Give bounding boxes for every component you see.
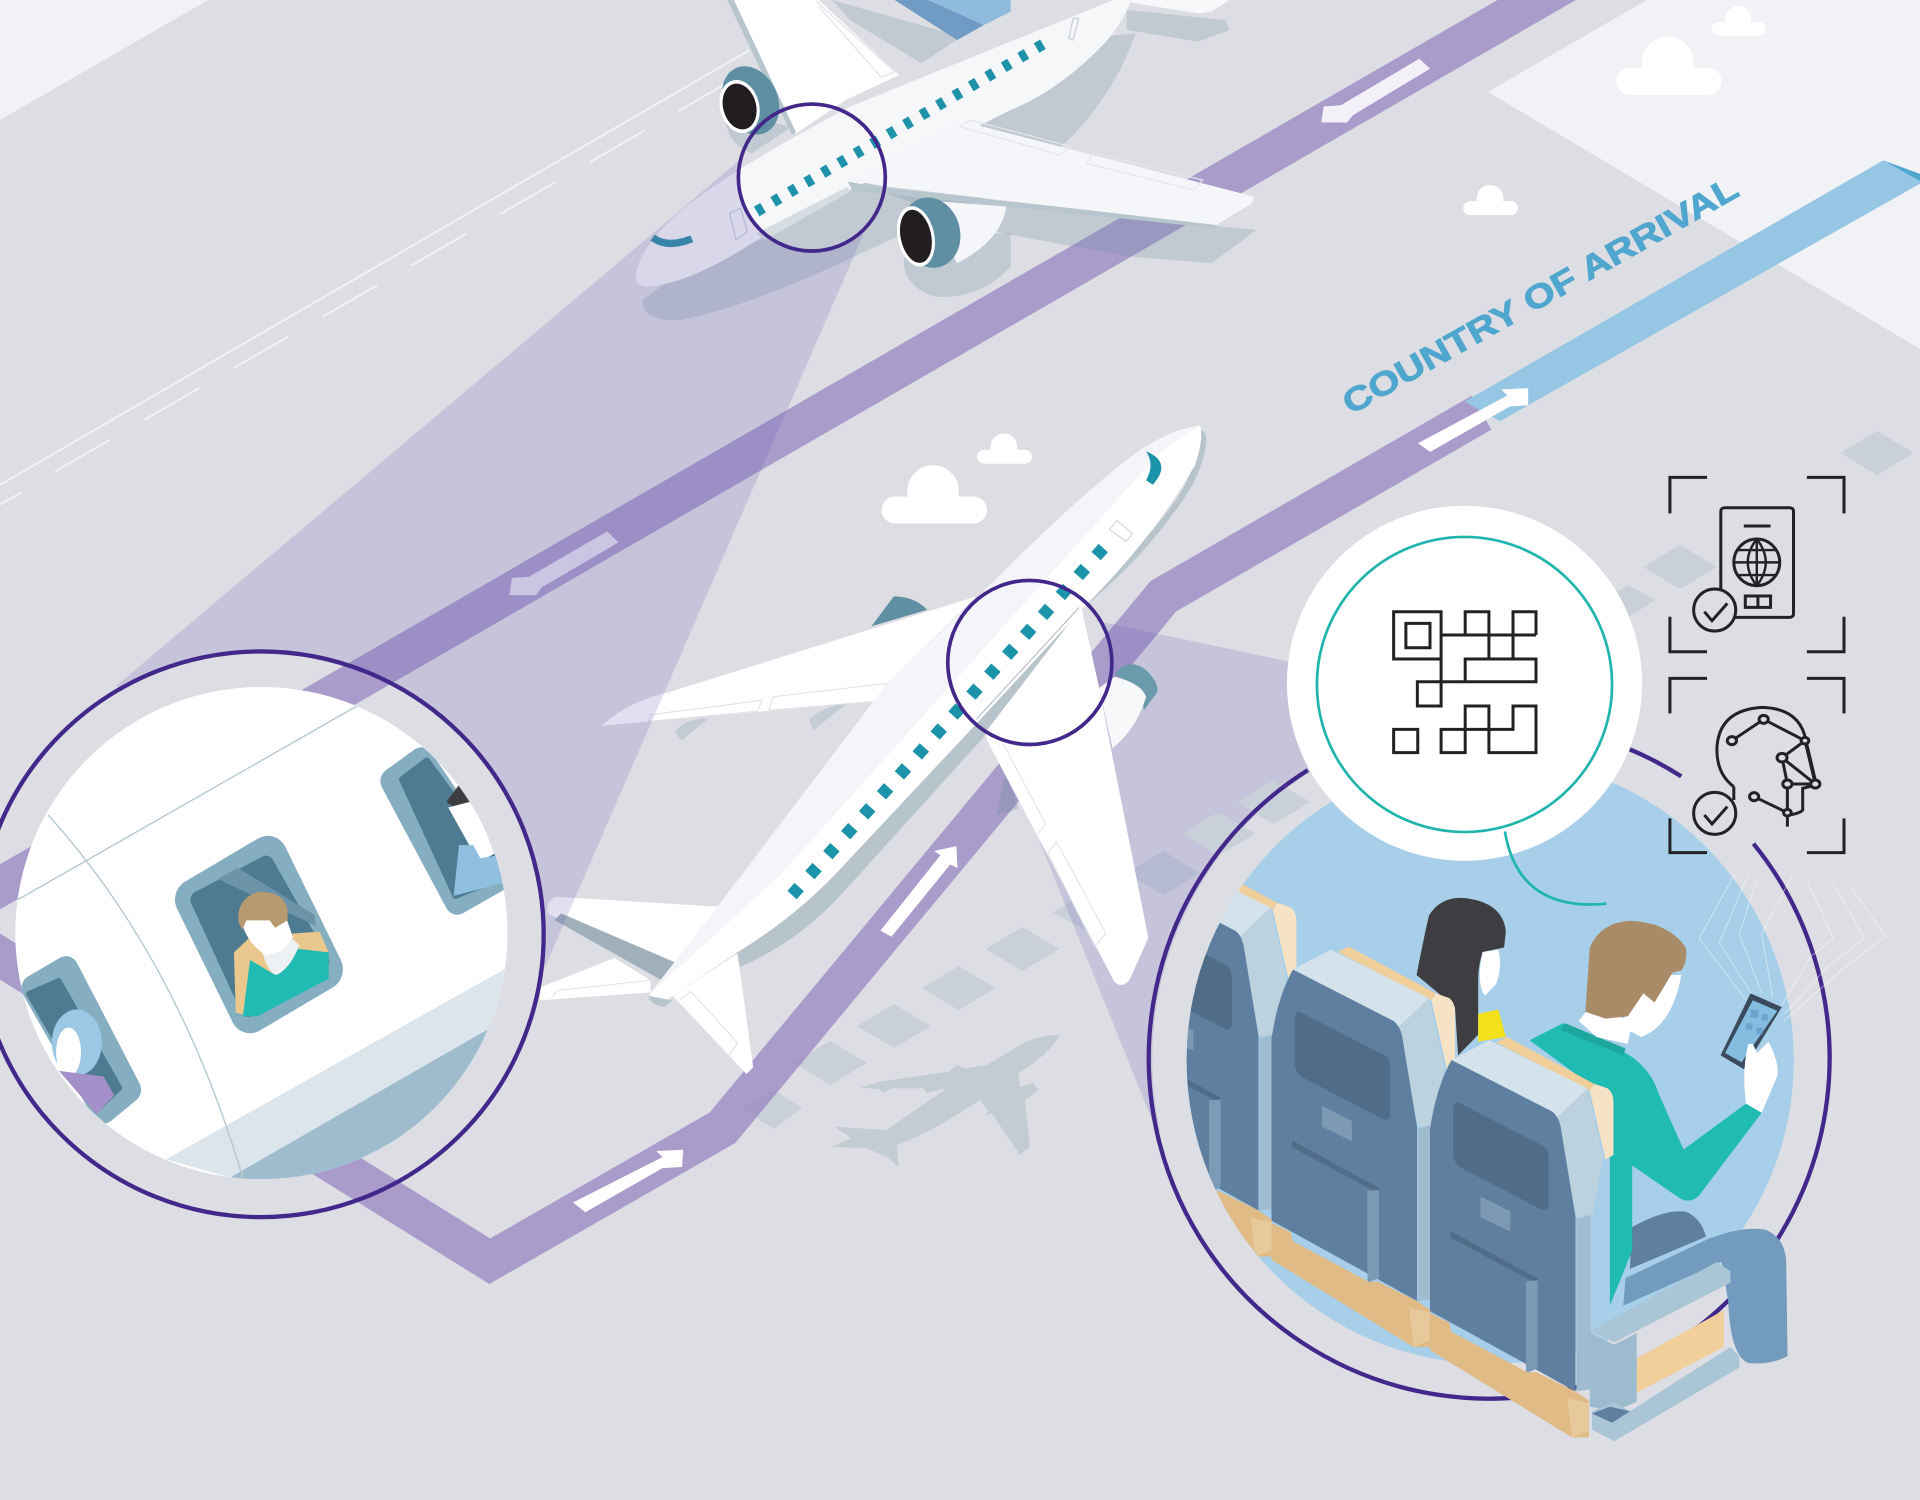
top plane (636, 0, 1256, 320)
plane shadow on ground (832, 1035, 1060, 1167)
label: country of arrival: COUNTRY OF ARRIVAL (1336, 170, 1745, 422)
seat row: near seat (1430, 1037, 1613, 1437)
route arrow 1 (1321, 59, 1430, 122)
right window (393, 760, 500, 902)
top plane: fuselage and wing (636, 0, 1254, 287)
ground diamonds (741, 431, 1914, 1129)
middle plane: nose stripe (1146, 451, 1161, 485)
seat row: far seat (1186, 884, 1296, 1256)
panel: passenger seat detail (1113, 719, 1886, 1441)
route arrow 5 (1418, 388, 1528, 452)
top-left light area (0, 0, 208, 120)
callout: teal pointer line (1505, 831, 1607, 904)
seat detail: lens ring (1149, 749, 1830, 1399)
top-right light area (1488, 0, 1920, 349)
small lens on top plane (738, 104, 885, 251)
window detail: lens background (0, 651, 544, 1217)
blue route: country of arrival (1464, 160, 1920, 421)
callout: white disc (1287, 506, 1642, 861)
armrest (1590, 1262, 1739, 1441)
top plane: windows (757, 43, 1044, 211)
beam from middle plane to seat detail (997, 622, 1316, 1133)
passenger: woman (1417, 898, 1506, 1055)
middle plane: engines and wing shadows (675, 596, 1158, 815)
panel: window detail (0, 649, 546, 1220)
passenger: man with phone (1530, 921, 1788, 1363)
top plane: nose stripe (653, 238, 692, 243)
middle plane: door (1109, 520, 1133, 541)
route arrow 4 (880, 846, 958, 937)
callout: QR code bubble (1287, 506, 1642, 904)
middle plane: fuselage (648, 425, 1206, 1007)
phone signal rays (1699, 874, 1886, 1021)
middle plane: tail (540, 897, 717, 1000)
top plane: right engine (892, 191, 968, 275)
centre window (195, 856, 323, 1013)
icon: facial recognition scan (1670, 678, 1844, 853)
seat row: middle seat (1271, 947, 1455, 1347)
cabin background circle (1187, 757, 1794, 1364)
window detail: cabin windows and passengers (18, 706, 511, 1204)
purple route: arrival leg (0, 413, 1482, 1261)
runway markings (0, 50, 749, 504)
icon: QR code (1394, 612, 1536, 753)
middle plane (540, 425, 1206, 1074)
top plane: shadows and tail (642, 0, 1256, 320)
purple route: departure leg (0, 0, 1592, 894)
small lens on middle plane (948, 580, 1112, 744)
seat detail: diamonds inside lens (1182, 780, 1310, 856)
window detail: lens ring (0, 651, 544, 1217)
window detail: fuselage close-up (15, 687, 508, 1179)
beam from top plane to left detail (116, 159, 866, 967)
seat detail: cabin scene (1186, 782, 1886, 1441)
middle plane: tail fin (673, 954, 753, 1074)
window detail: route seen through lens (0, 666, 396, 1200)
middle plane: windows (792, 548, 1104, 895)
left window (34, 969, 129, 1110)
route arrow 3 (573, 1150, 683, 1212)
seat detail: lens background (1152, 719, 1833, 1400)
clouds (882, 6, 1766, 523)
callout: teal ring (1317, 537, 1612, 832)
top plane: left engine (711, 57, 790, 144)
route arrow 2 (509, 531, 618, 595)
icon: passport scan (1670, 477, 1844, 652)
middle plane: right wing (976, 608, 1148, 985)
middle plane: left wing (601, 596, 976, 726)
